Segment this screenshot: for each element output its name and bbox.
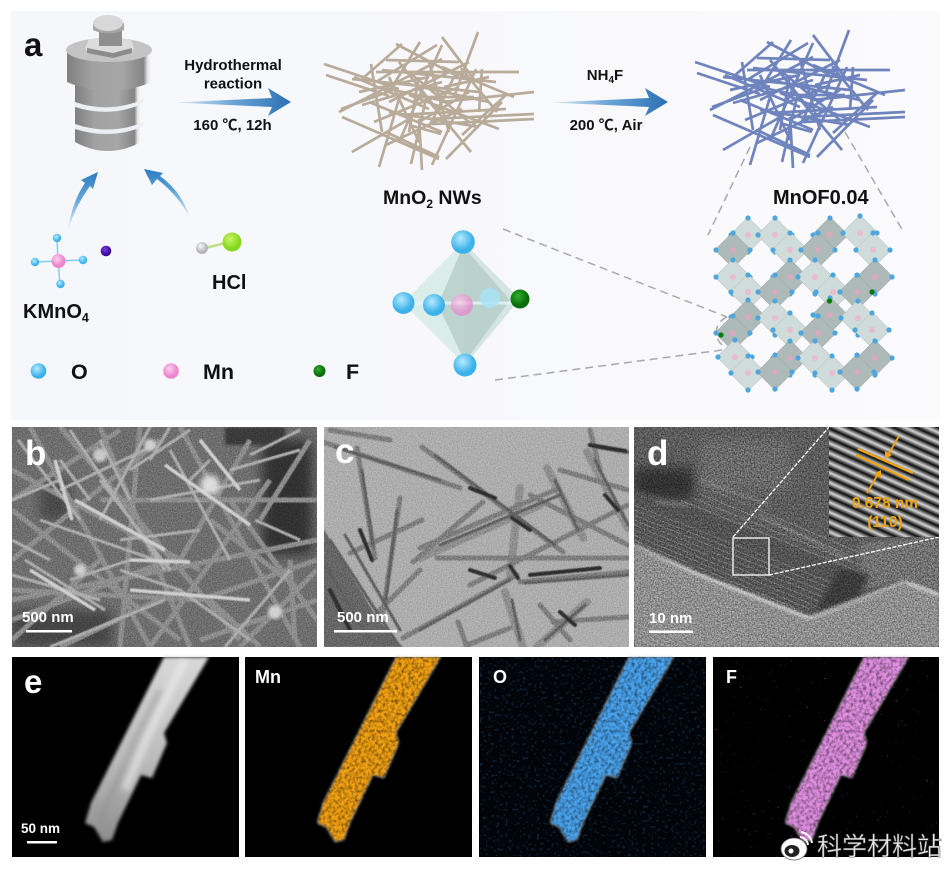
panel label a: a <box>24 26 43 63</box>
diagram: MnO5F octahedron <box>392 230 530 376</box>
text: fluorination conditions: F <box>614 67 623 84</box>
icon: HCl molecule <box>196 232 242 254</box>
label Mn: Mn <box>255 667 281 687</box>
text: fluorination conditions: 200 ℃, Air <box>570 117 643 134</box>
nanowire HAADF <box>85 657 209 842</box>
panel d: HRTEM image <box>634 427 939 647</box>
label d: d <box>647 434 668 473</box>
text: hydrothermal conditions: Hydrothermal <box>184 57 282 74</box>
panel: Mn map <box>245 657 472 857</box>
scale bar 500 nm: 500 nm <box>337 609 389 626</box>
text: fluorination conditions <box>570 67 643 134</box>
arrow: KMnO4 to autoclave <box>68 172 98 230</box>
watermark text: 科学材料站 <box>817 827 942 863</box>
legend: atoms: O <box>71 360 88 384</box>
label: MnO2 NWs: MnO <box>383 187 426 209</box>
Mn nanowire <box>317 657 441 842</box>
text: fluorination conditions: 4 <box>608 75 614 86</box>
label: KMnO4: KMnO <box>23 301 82 323</box>
icon: autoclave <box>66 15 152 151</box>
dashed zoom lines <box>495 132 903 380</box>
text: hydrothermal conditions: reaction <box>204 76 262 92</box>
scale bar 500 nm <box>334 609 397 632</box>
label c: c <box>335 432 354 471</box>
scale bar 500 nm: 500 nm <box>22 609 74 626</box>
zoom box and dashed guides <box>733 427 939 575</box>
text: hydrothermal conditions: 160 ℃, 12h <box>193 117 272 134</box>
lattice annotation: 0.678 nm <box>852 495 918 512</box>
arrow: HCl to autoclave <box>144 169 190 218</box>
inset: lattice fringes <box>829 427 939 537</box>
lattice annotation: (110) <box>867 514 903 531</box>
icon: KMnO4 molecule <box>31 234 111 288</box>
nanowires: MnOF0.04 <box>695 30 905 168</box>
panel: O map <box>479 657 706 857</box>
scale bar 10 nm: 10 nm <box>649 610 692 627</box>
lattice annotation <box>852 495 918 531</box>
panel e: HAADF image <box>12 657 239 857</box>
label: KMnO4: 4 <box>82 311 89 325</box>
panel c: TEM image <box>323 427 629 647</box>
scale bar 50 nm: 50 nm <box>21 821 60 836</box>
scale bar 50 nm <box>21 821 60 844</box>
text: fluorination conditions: NH <box>587 67 608 84</box>
watermark <box>781 827 942 863</box>
lattice spacing markers <box>856 436 913 493</box>
arrow: fluorination <box>550 88 668 116</box>
diagram: MnOF0.04 crystal lattice <box>713 213 895 393</box>
O nanowire <box>550 657 674 842</box>
label: MnO2 NWs: NWs <box>433 187 482 209</box>
label b: b <box>25 434 46 473</box>
label: MnOF0.04: MnOF0.04 <box>773 187 869 209</box>
label: MnO2 NWs: 2 <box>426 197 433 211</box>
nanowires: MnO2 <box>324 32 534 170</box>
label F: F <box>726 667 737 687</box>
legend: atoms: Mn <box>203 360 234 384</box>
legend: atoms: F <box>346 360 359 384</box>
label: HCl: HCl <box>212 272 246 294</box>
label O: O <box>493 667 507 687</box>
label e: e <box>24 663 42 700</box>
panel a: synthesis schematic <box>11 11 940 420</box>
F nanowire <box>785 657 909 842</box>
icon: weibo logo <box>781 832 812 860</box>
panel: F map <box>713 657 939 857</box>
arrow: hydrothermal <box>175 88 291 116</box>
panel b: SEM image <box>12 427 317 647</box>
text: hydrothermal conditions <box>184 57 282 134</box>
legend: atoms <box>31 360 359 384</box>
